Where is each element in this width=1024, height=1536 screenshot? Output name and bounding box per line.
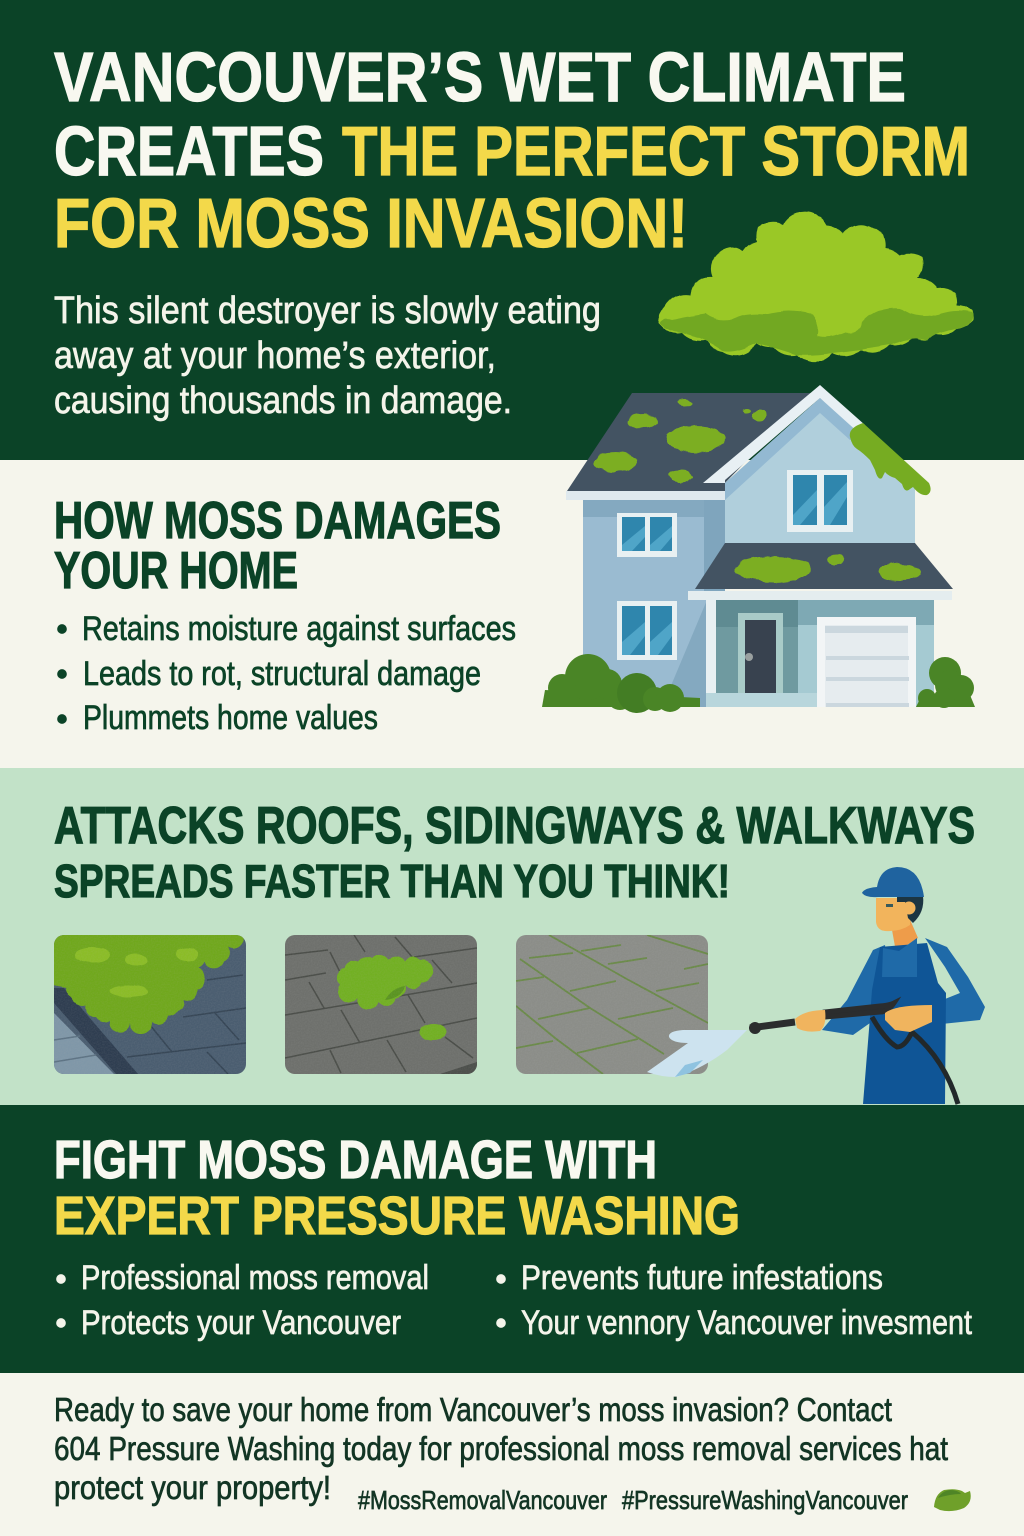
panel: expert pressure washing band background [0, 1105, 1024, 1373]
heading: fight moss damage: FIGHT MOSS DAMAGE WITH [54, 1130, 657, 1190]
porch column [706, 600, 716, 707]
moss draped over gable [850, 423, 931, 495]
bullet list: services: Prevents future infestations [521, 1259, 883, 1297]
porch wall [707, 600, 934, 707]
left wall [583, 500, 725, 707]
bullet list: damages: Retains moisture against surfaces [82, 610, 516, 648]
hose [872, 1017, 958, 1104]
icon: small moss clump [934, 1489, 971, 1511]
left upper window [617, 513, 677, 557]
call to action text [54, 1391, 948, 1506]
panel: how moss damages band background [0, 460, 1024, 768]
porch roof [695, 543, 953, 589]
roof moss patches [593, 400, 921, 582]
gable trim [703, 385, 865, 483]
intro text: causing thousands in damage. [54, 380, 512, 422]
subheading: spreads faster: SPREADS FASTER THAN YOU THINK! [54, 855, 730, 907]
overalls [863, 943, 946, 1104]
porch eave [688, 591, 952, 600]
main roof [567, 393, 812, 491]
title: FOR MOSS INVASION! [54, 184, 688, 262]
heading: how moss damages your home: HOW MOSS DAMAGES [54, 492, 501, 550]
door [738, 613, 783, 693]
intro text: This silent destroyer is slowly eating [54, 290, 601, 332]
heading: fight moss damage: EXPERT PRESSURE WASHING [54, 1186, 740, 1246]
panel: attacks band background [0, 768, 1024, 1105]
title [54, 38, 970, 262]
heading: how moss damages your home [54, 492, 501, 600]
garage door [817, 617, 916, 707]
panel: intro band background [0, 0, 1024, 460]
bullet list: services: Protects your Vancouver [81, 1304, 401, 1342]
shirt chest [882, 938, 917, 977]
call to action text: protect your property! [54, 1469, 331, 1506]
hashtags: #PressureWashingVancouver [622, 1485, 908, 1515]
icon: water spray [647, 1030, 747, 1077]
icon: pressure washing worker [749, 867, 985, 1104]
bullet list: services [56, 1259, 972, 1342]
gun handle [825, 1003, 894, 1017]
head [876, 898, 910, 931]
right bushes [916, 657, 975, 708]
panel: call to action band background [0, 1373, 1024, 1536]
neck [892, 915, 918, 952]
heading: fight moss damage [54, 1130, 740, 1246]
hair [897, 896, 923, 923]
porch step [706, 693, 817, 707]
left arm [822, 945, 890, 1035]
main roof eave [566, 491, 725, 500]
wand [750, 1022, 795, 1028]
bullet list: damages: Leads to rot, structural damage [83, 655, 481, 693]
hashtags [358, 1485, 908, 1515]
icon: moss clump [658, 212, 973, 362]
title: CREATES [54, 112, 324, 190]
bullet list: services: Professional moss removal [81, 1259, 429, 1297]
photo: moss in pavers [516, 935, 708, 1074]
left hand [795, 1010, 825, 1032]
photo: moss on roof [50, 930, 246, 1074]
left bushes [542, 654, 700, 713]
right arm [925, 938, 985, 1025]
hashtags: #MossRemovalVancouver [358, 1485, 607, 1515]
left lower window [617, 601, 677, 660]
heading: how moss damages your home: YOUR HOME [54, 542, 298, 600]
call to action text: Ready to save your home from Vancouver’s moss invasion? Contact [54, 1391, 892, 1428]
intro text [54, 290, 601, 422]
photo: moss on shingles [285, 935, 477, 1074]
bullet list: damages: Plummets home values [83, 699, 378, 737]
right hand [885, 1005, 932, 1032]
icon: house with moss [542, 385, 975, 713]
intro text: away at your home’s exterior, [54, 335, 496, 377]
bullet list: damages [58, 610, 516, 737]
upper gable wall [725, 398, 915, 543]
upper window [787, 470, 853, 532]
porch recess [716, 600, 798, 693]
cap [862, 867, 924, 897]
